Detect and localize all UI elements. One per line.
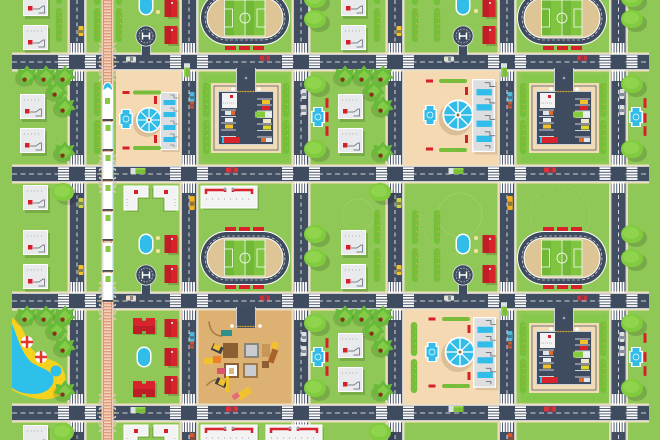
stadium benches [225,46,582,289]
plaza block 1 [116,71,182,165]
palm trees [15,65,394,402]
flowers [156,9,478,253]
stadium 4 [517,231,607,285]
red benches by fountains [326,98,646,376]
plaza 2 complex [423,79,498,155]
site machines [204,322,279,400]
stadium 3 [200,231,290,285]
site plots [223,343,270,378]
vehicles [78,26,624,440]
stadium 2 [517,0,607,45]
lake [12,318,66,399]
long buildings [201,186,324,440]
intersections and crosswalks [64,48,632,426]
houses [20,0,368,440]
plaza block 3 [403,308,498,404]
parking hedges over grass [203,83,606,393]
train [102,82,113,302]
parking lot 2 [529,68,599,153]
plaza block 2 [403,71,498,165]
construction site [204,307,279,400]
parking lot 3 [529,308,599,393]
plaza 1 complex [119,90,180,152]
decorative arcs on empty blocks [342,175,590,255]
railway [99,0,116,440]
parking block grass [203,75,607,402]
horizontal roads [12,62,649,413]
parking lot 1 [211,68,281,153]
red houses [133,0,497,398]
hedges [56,0,606,393]
L-shaped buildings [124,186,178,440]
stadium 1 [200,0,290,45]
site access road [230,307,262,328]
pools [136,0,470,368]
umbrellas [21,336,47,363]
construction site ground [198,310,292,404]
helipads [136,26,474,294]
roadside fountains [311,107,643,367]
plaza 3 complex [425,317,499,390]
